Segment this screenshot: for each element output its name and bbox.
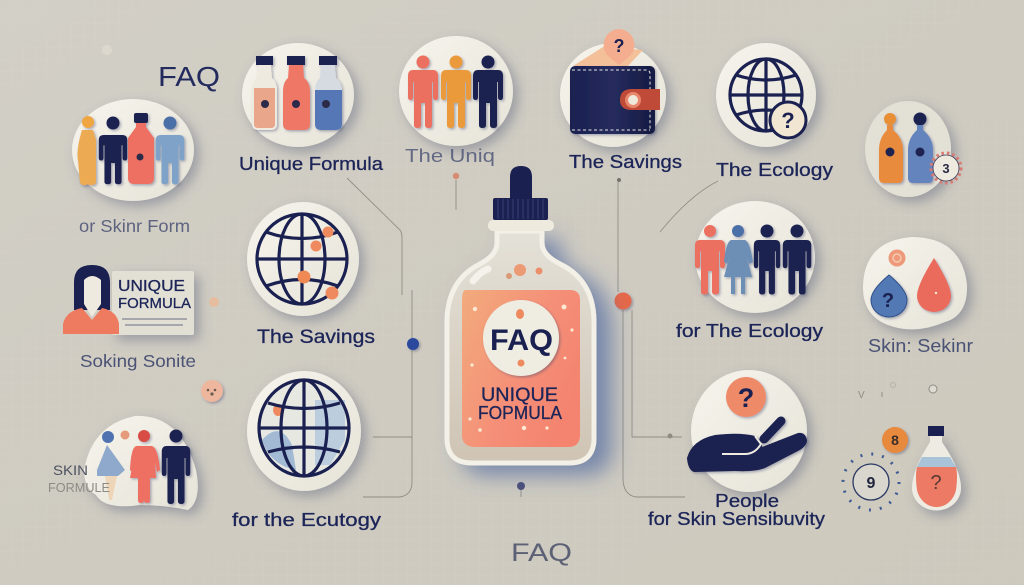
label: SKIN FORMULE: FORMULE [48, 481, 110, 495]
label: Soking Sonite: Soking Sonite [80, 351, 196, 371]
label: The Savings left: The Savings [257, 327, 375, 348]
text: UNIQUE FORMULA card: FORMULA [118, 295, 191, 312]
panel: people bottom left [84, 416, 198, 510]
connector lines [347, 178, 718, 497]
text: UNIQUE FORMULA card: UNIQUE [118, 278, 185, 295]
panel: bottles right [865, 101, 961, 197]
label: for the Ecutogy: for the Ecutogy [232, 509, 382, 530]
panel: people right [695, 201, 815, 313]
icon: orange number ball [882, 427, 908, 453]
label: or Skinr Form: or Skinr Form [79, 216, 190, 236]
panel: bottles [242, 43, 354, 147]
label: The Ecology top: The Ecology [716, 159, 834, 180]
bottle text [478, 385, 562, 423]
label: People for Skin Sensibuvity: People [715, 490, 779, 511]
small marks: V [858, 390, 865, 401]
label: The Uniq: The Uniq [405, 145, 495, 166]
panel: bottles right: 3 [942, 161, 950, 176]
FAQ badge [483, 300, 559, 376]
label: for The Ecology: for The Ecology [676, 320, 824, 341]
panel: globe with question [716, 43, 816, 147]
text: UNIQUE FORMULA card [118, 278, 191, 312]
panel: globe with question: ? [781, 108, 795, 133]
panel: drops: ? [882, 290, 894, 312]
FAQ badge: FAQ [490, 324, 553, 357]
label: People for Skin Sensibuvity [648, 490, 826, 529]
label: SKIN FORMULE [48, 462, 110, 495]
label: Unique Formula: Unique Formula [239, 153, 384, 174]
label: Skin Sekinr: Skin: Sekinr [868, 336, 973, 356]
icon: number dial: 9 [867, 475, 876, 492]
panel: people center [399, 36, 513, 146]
icon: small bottle [912, 426, 961, 510]
label: The Savings top: The Savings [569, 151, 682, 172]
panel: hand [687, 370, 807, 492]
panel: main bottle [447, 166, 594, 463]
connector dots [102, 45, 672, 490]
label: SKIN FORMULE: SKIN [53, 462, 88, 478]
icon: question ball: ? [738, 383, 754, 413]
panel: wallet [560, 29, 666, 147]
dropper cap [488, 166, 554, 231]
panel: wallet: ? [614, 36, 624, 56]
panel: globe bottom [247, 371, 361, 491]
panel: people left [72, 99, 194, 201]
panel: drops [863, 237, 967, 329]
icon: hand [687, 421, 807, 472]
fluid label [462, 290, 580, 447]
small marks [858, 382, 937, 401]
footer: FAQ bottom: FAQ [511, 539, 572, 567]
panel: globe dots [247, 202, 359, 316]
panel: woman card [63, 265, 194, 335]
title: FAQ top: FAQ [158, 61, 220, 92]
icon: number dial [843, 454, 899, 510]
icon: orange number ball: 8 [891, 432, 899, 448]
bottle text: FOPMULA [478, 403, 562, 423]
label: People for Skin Sensibuvity: for Skin Sensibuvity [648, 508, 826, 529]
icon: small bottle: ? [930, 472, 942, 494]
bottle text: UNIQUE [481, 385, 558, 406]
